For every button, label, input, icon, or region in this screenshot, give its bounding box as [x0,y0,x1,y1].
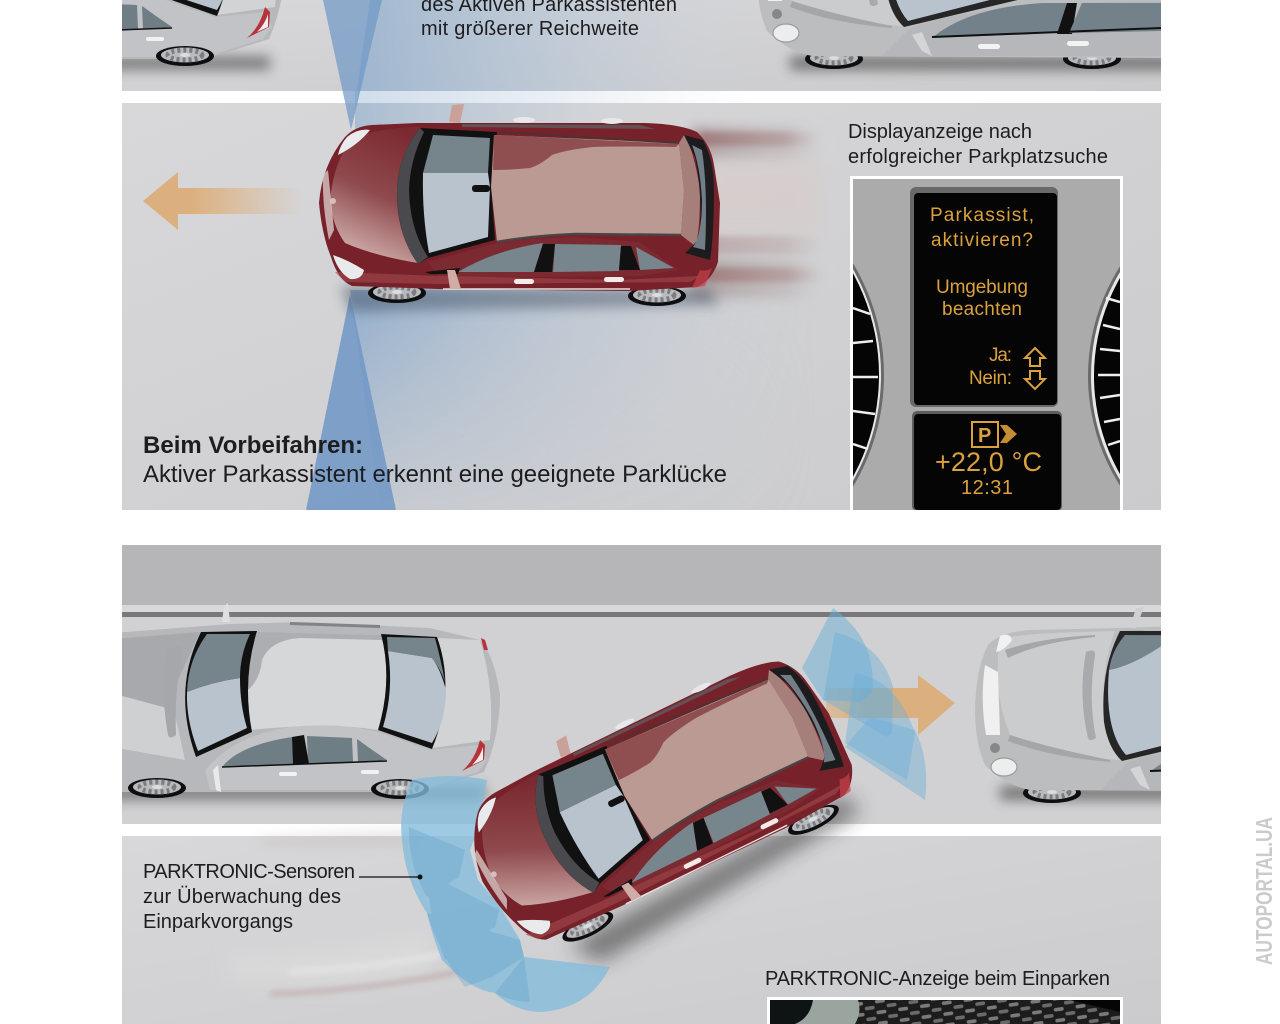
arrow: direction of travel, left [143,172,302,230]
display: lower screen [912,411,1062,511]
display: lower screen: +22,0 °C [935,447,1042,477]
text: PARKTRONIC sensors caption: Einparkvorgangs [143,911,293,933]
PARKTRONIC sensor fans, front [401,776,610,1012]
text: display caption: Displayanzeige nach [848,121,1032,143]
callout line to sensor fan [359,874,422,880]
display: main screen: Nein: [969,368,1012,389]
display: main screen: Umgebung [936,277,1028,298]
silver wagon, top right [757,0,1161,69]
display: main screen: beachten [942,299,1022,320]
panel: top road section with parked cars [122,0,1161,91]
icon: parking symbol [972,422,1017,447]
silver sedan rear, top left [122,0,282,66]
text: display caption: erfolgreicher Parkplatzsuche [848,146,1108,168]
red car top view, parking [441,628,872,971]
sensor beam: lower range [306,290,670,510]
panel: passing the parking space [122,103,1161,510]
panel: PARKTRONIC lower section [122,830,1161,1024]
display: main screen: Ja: [989,345,1012,366]
shadow under red car [340,286,720,312]
watermark: AUTOPORTAL.UA [1251,817,1277,965]
motion blur trail of car [230,830,458,994]
text: PARKTRONIC sensors caption: zur Überwachung des [143,886,341,908]
shadow under parked cars, top section [100,56,1210,70]
shadow under parked cars [100,786,1200,800]
icon: parking symbol: P [978,425,991,447]
display: main screen: Parkassist, [930,205,1034,226]
gauge: left dial [853,264,884,487]
display: lower screen: 12:31 [961,477,1013,499]
text: PARKTRONIC sensors caption: PARKTRONIC-Sensoren [143,861,355,883]
icon: down arrow [1025,371,1045,389]
display: main screen: aktivieren? [931,230,1033,251]
text: upper sensor caption: mit größerer Reichweite [421,18,639,40]
text: display caption [848,121,1108,168]
display: main screen [910,187,1058,407]
instrument cluster photo [850,176,1123,510]
silver sedan, side-top view [100,603,500,799]
text: upper sensor caption [421,0,677,40]
PARKTRONIC display photo [767,997,1123,1024]
arrow: direction of travel, right [826,675,955,735]
text: Beim Vorbeifahren: Aktiver Parkassistent erkennt eine geeignete Parklücke [143,461,727,488]
text: Beim Vorbeifahren [143,432,727,488]
sensor beam: upper range [323,0,660,130]
motion blur streaks behind red car [690,127,830,298]
panel: parking manoeuvre road section [122,545,1161,824]
text: PARKTRONIC display caption: PARKTRONIC-Anzeige beim Einparken [765,968,1110,990]
red car top view, passing [319,104,720,306]
text: PARKTRONIC sensors caption [143,861,355,933]
icon: up arrow [1025,348,1045,366]
gauge: right dial [1088,266,1120,486]
shadow under red car, parking [570,795,860,962]
text: Beim Vorbeifahren: Beim Vorbeifahren: [143,432,363,459]
PARKTRONIC sensor fans, rear [802,608,926,800]
silver wagon front [975,607,1161,803]
